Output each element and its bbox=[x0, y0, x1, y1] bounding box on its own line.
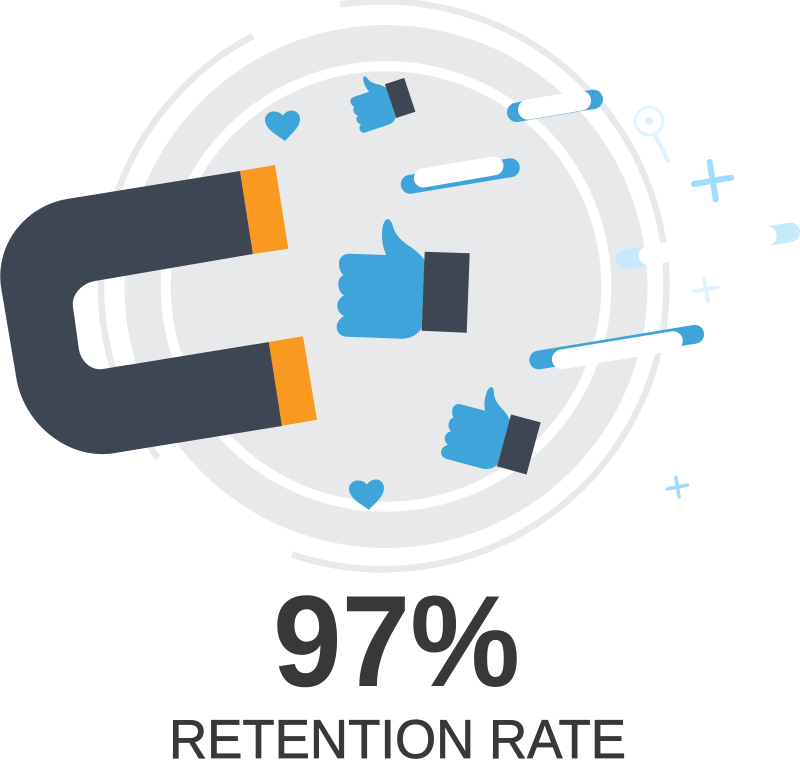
magnet pole: top bbox=[240, 165, 288, 254]
icon: small thumbs up top bbox=[343, 63, 418, 135]
magnet pole: bottom bbox=[269, 336, 317, 426]
icon: heart bottom bbox=[349, 480, 384, 510]
speed streak: lower right bbox=[539, 334, 695, 360]
icon: small plus bbox=[667, 477, 687, 497]
icon: large thumbs up bbox=[337, 219, 470, 339]
magnet bbox=[0, 165, 317, 454]
icon: small thumbs up bottom bbox=[439, 379, 546, 479]
headline number: 97% bbox=[273, 568, 520, 714]
speed streak: centre bbox=[410, 166, 510, 184]
icon: magnifier bbox=[635, 107, 668, 161]
icon: large plus bbox=[694, 162, 731, 199]
speed streak: top right bbox=[517, 99, 593, 112]
icon: pale plus bbox=[694, 278, 718, 301]
outer ring arcs bbox=[101, 1, 666, 569]
speed streak: pale right bbox=[626, 232, 790, 259]
background circle bbox=[124, 25, 648, 548]
icon: heart top bbox=[265, 110, 300, 141]
magnet body bbox=[0, 171, 282, 454]
